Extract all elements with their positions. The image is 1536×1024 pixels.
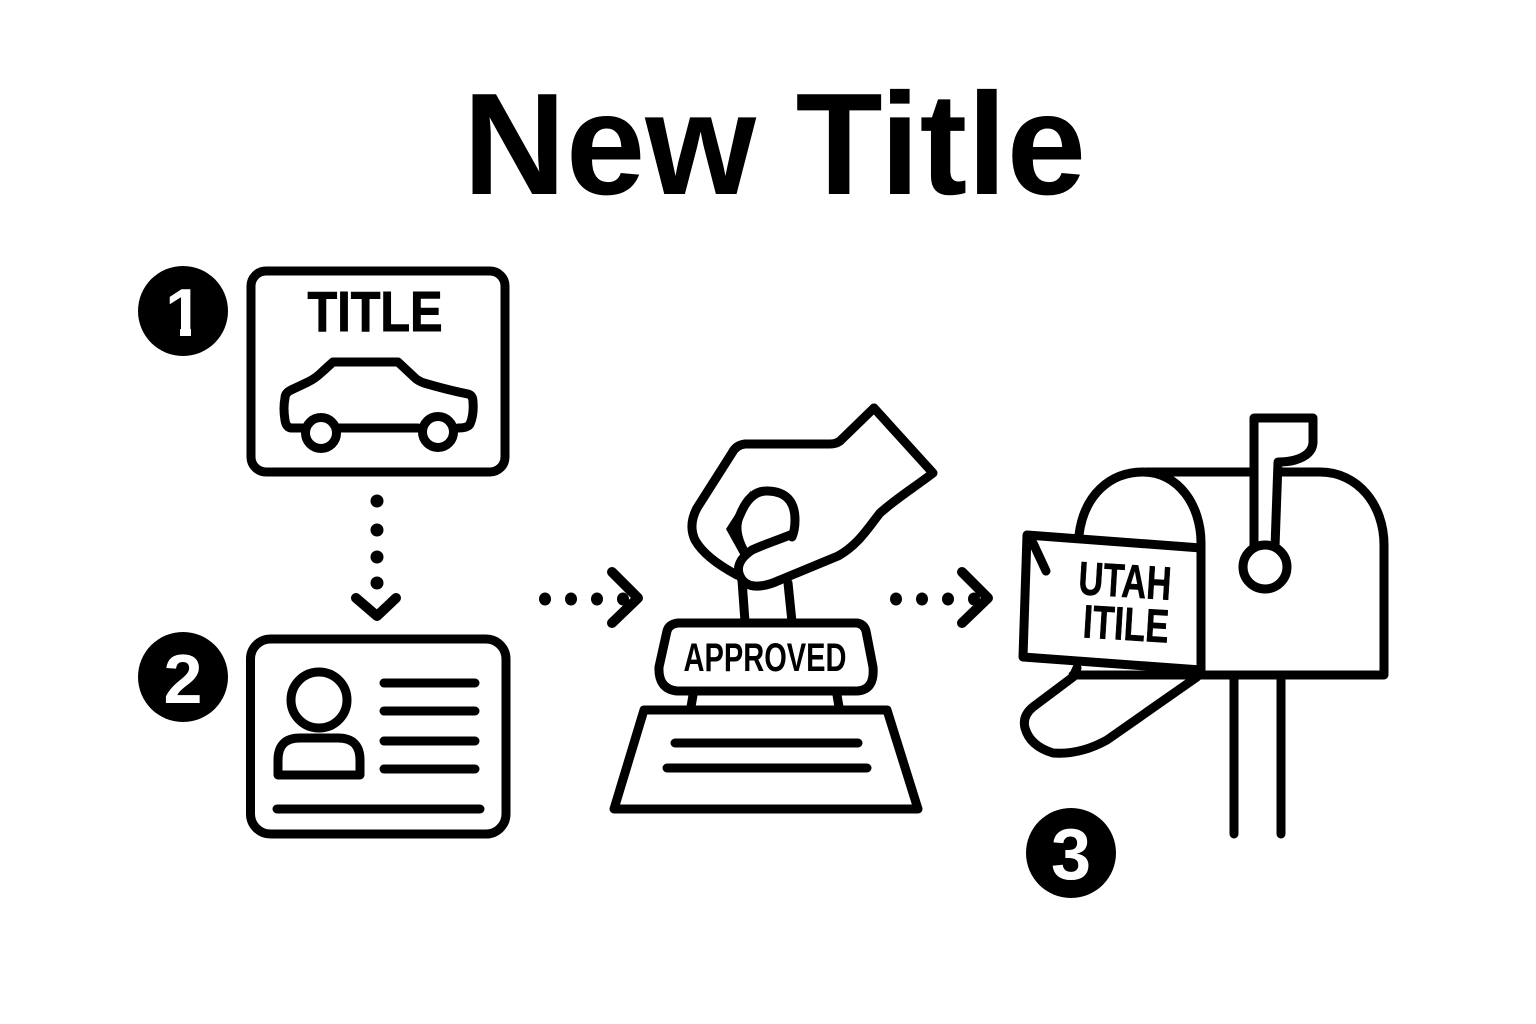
icon: mailbox with Utah title <box>1023 418 1384 834</box>
icon: hand holding stamp: APPROVED <box>684 636 846 680</box>
icon: ID card <box>250 639 506 834</box>
badge 2 <box>138 632 228 722</box>
arrow: stamp to mailbox <box>890 572 988 623</box>
badge 2: 2 <box>164 640 202 718</box>
icon: hand holding stamp <box>614 408 933 809</box>
icon: mailbox with Utah title: UTAH <box>1077 551 1173 610</box>
arrow: step 2 to stamp <box>539 572 638 623</box>
badge 1: 1 <box>165 275 203 351</box>
icon: mailbox with Utah title: ITILE <box>1081 594 1171 653</box>
badge 3: 3 <box>1051 815 1091 895</box>
arrow: step 1 to step 2 <box>356 494 396 616</box>
title: New Title <box>463 63 1086 225</box>
icon: title document with car: TITLE <box>308 280 442 344</box>
icon: title document with car <box>251 271 505 472</box>
badge 3 <box>1026 808 1116 898</box>
badge 1 <box>138 266 228 356</box>
